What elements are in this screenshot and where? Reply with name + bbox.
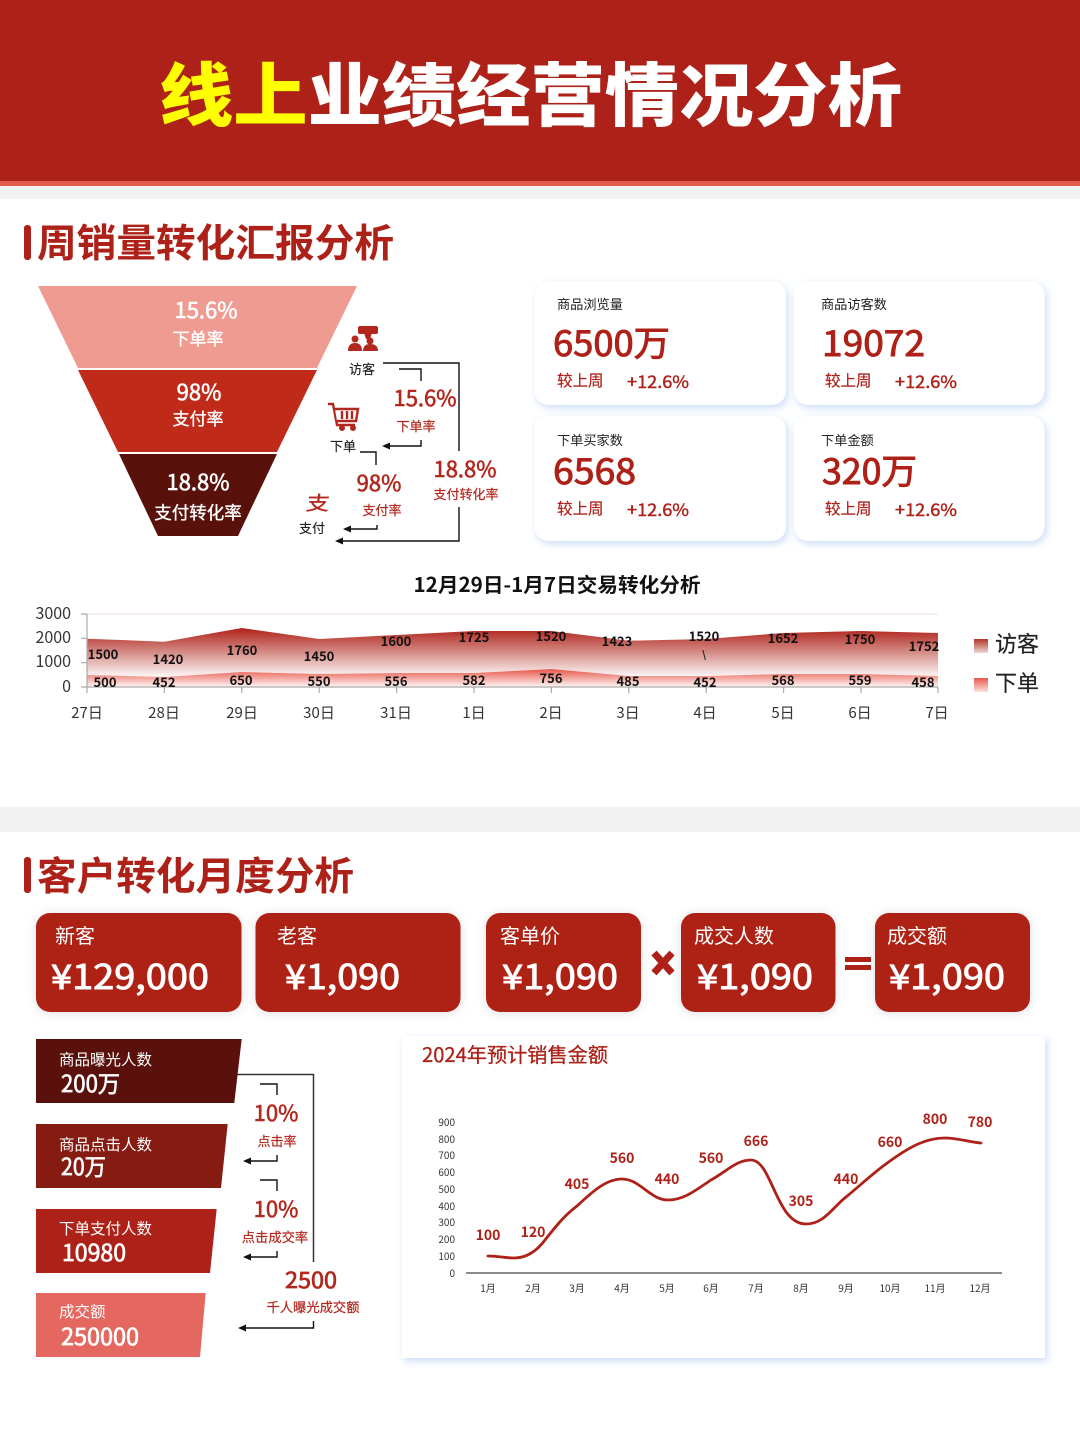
order series values: 559 (848, 670, 872, 689)
x axis labels: 4月 (614, 1280, 630, 1295)
visitor series values: 1500 (88, 644, 119, 663)
card: average order value (486, 913, 641, 1012)
y axis labels: 3000 (35, 600, 71, 624)
order series values: 500 (93, 672, 117, 691)
panel: funnel conversion flow (299, 326, 499, 541)
x axis labels: 3日 (616, 702, 640, 723)
chart axes (81, 614, 938, 693)
step: turnover (36, 1293, 206, 1357)
data labels: 666 (744, 1131, 768, 1151)
card: visitors (794, 281, 1044, 405)
data labels: 405 (565, 1174, 589, 1194)
flow labels: 下单 (330, 436, 356, 455)
x axis labels: 7月 (748, 1280, 764, 1295)
visitor series values: 1760 (227, 640, 258, 659)
card: new customers: ¥129,000 (51, 950, 209, 999)
step rates: 点击成交率 (242, 1227, 308, 1246)
data labels: 120 (521, 1222, 545, 1242)
card: order amount: 320万 (822, 444, 917, 495)
card: buyers: 成交人数 (694, 920, 774, 949)
y axis labels: 600 (438, 1164, 455, 1179)
legend (974, 627, 1039, 698)
x axis labels: 9月 (838, 1280, 854, 1295)
order series values: 550 (307, 671, 331, 690)
card: order amount: 较上周 (825, 497, 872, 519)
flow rates (357, 381, 499, 519)
y axis labels: 100 (438, 1248, 455, 1263)
visitor series values: 1450 (304, 646, 335, 665)
card: page views: +12.6% (627, 368, 689, 393)
step: payers: 10980 (62, 1234, 126, 1268)
x axis labels: 28日 (148, 702, 180, 723)
card: buyers: +12.6% (627, 496, 689, 521)
icon: shopping cart (328, 404, 358, 430)
flow labels: 访客 (349, 359, 375, 378)
step: exposure: 商品曝光人数 (59, 1048, 153, 1070)
card: visitors: +12.6% (895, 368, 957, 393)
flow labels (299, 359, 375, 537)
y axis labels: 1000 (35, 648, 71, 672)
order series values: 485 (616, 671, 640, 690)
visitor series values: 1600 (381, 631, 412, 650)
step: turnover: 成交额 (59, 1300, 106, 1322)
card: buyers: 6568 (553, 444, 636, 495)
y axis labels: 700 (438, 1147, 455, 1162)
visitor series values: 1752 (909, 636, 939, 655)
x axis labels: 8月 (793, 1280, 809, 1295)
flow rates: 支付转化率 (433, 484, 499, 503)
x axis labels: 30日 (303, 702, 335, 723)
order series values (93, 668, 935, 691)
order series values: 556 (384, 671, 408, 690)
y axis labels: 0 (62, 673, 71, 697)
card: buyers: 下单买家数 (557, 430, 623, 449)
data labels: 560 (610, 1148, 634, 1168)
card: visitors: 19072 (822, 316, 925, 367)
visitor series values: 1750 (845, 629, 876, 648)
card: buyers: ¥1,090 (697, 950, 813, 999)
step: payers (36, 1209, 217, 1273)
x axis labels: 2月 (525, 1280, 541, 1295)
card: page views: 6500万 (553, 316, 670, 367)
order series values: 452 (152, 672, 176, 691)
y axis labels: 2000 (35, 624, 71, 648)
card: page views (534, 281, 786, 405)
card: buyers (534, 416, 786, 541)
panel: conversion funnel (38, 286, 357, 536)
order series values: 756 (539, 668, 563, 687)
card: turnover: ¥1,090 (889, 950, 1005, 999)
data labels: 560 (699, 1148, 723, 1168)
y axis labels: 500 (438, 1181, 455, 1196)
data labels: 100 (476, 1225, 500, 1245)
chart title: 12月29日-1月7日交易转化分析 (414, 569, 700, 598)
icon: alipay glyph: 支 (305, 488, 332, 516)
panel: conversion funnel: 98% (177, 375, 221, 407)
panel: revenue formula cards (36, 913, 1030, 1012)
panel: conversion funnel: 15.6% (174, 293, 238, 325)
visitor series values: 1725 (459, 627, 489, 646)
x axis labels (480, 1280, 991, 1295)
legend: 下单 (995, 666, 1039, 698)
y axis labels: 300 (438, 1214, 455, 1229)
card: buyers (681, 913, 836, 1012)
y axis labels: 200 (438, 1231, 455, 1246)
card: page views: 较上周 (557, 369, 604, 391)
y axis labels (35, 600, 71, 697)
visitor series values: 1423 (602, 631, 632, 650)
card: average order value: ¥1,090 (502, 950, 618, 999)
card: order amount (794, 416, 1044, 541)
section heading: monthly customer conversion: 客户转化月度分析 (37, 846, 354, 902)
data labels: 780 (968, 1112, 992, 1132)
panel: conversion funnel: 支付率 (172, 405, 224, 430)
card: visitors: 较上周 (825, 369, 872, 391)
flow rates: 支付率 (362, 500, 402, 519)
card: order amount: 下单金额 (821, 430, 874, 449)
visitor series values: \ (702, 646, 706, 661)
visitor series values: 1652 (768, 628, 798, 647)
visitor series values: 1520 (689, 626, 720, 645)
y axis labels: 400 (438, 1198, 455, 1213)
y axis labels: 800 (438, 1131, 455, 1146)
x axis labels: 2日 (539, 702, 563, 723)
visitor series values (88, 626, 939, 668)
panel: exposure to turnover steps (36, 1039, 360, 1357)
card: turnover: 成交额 (887, 920, 947, 949)
x axis labels: 31日 (380, 702, 412, 723)
card: new customers: 新客 (55, 920, 95, 949)
legend: 访客 (995, 627, 1039, 659)
card: returning customers (256, 913, 460, 1012)
flow rates: 15.6% (393, 381, 457, 413)
step connector lines (237, 1074, 314, 1328)
data labels: 660 (878, 1132, 902, 1152)
sales line (488, 1138, 981, 1258)
step: exposure: 200万 (61, 1065, 120, 1099)
data labels: 800 (923, 1109, 947, 1129)
x axis labels: 7日 (925, 702, 949, 723)
x axis labels: 5日 (771, 702, 795, 723)
step rates: 点击率 (257, 1131, 297, 1150)
card: page views: 商品浏览量 (557, 294, 623, 313)
step: exposure (36, 1039, 242, 1103)
x axis labels: 1日 (462, 702, 486, 723)
card: returning customers: 老客 (277, 920, 317, 949)
flow rates: 98% (357, 466, 401, 498)
panel: KPI cards (534, 281, 1044, 541)
step rates: 2500 (285, 1263, 337, 1295)
step: turnover: 250000 (61, 1318, 139, 1352)
x axis labels: 12月 (969, 1280, 991, 1295)
chart: transaction conversion area chart (35, 569, 1039, 723)
order series values: 650 (229, 670, 253, 689)
visitor series values: 1520 (536, 626, 567, 645)
panel: conversion funnel: 18.8% (166, 465, 230, 497)
icon: visitors (348, 326, 378, 351)
x axis labels: 1月 (480, 1280, 496, 1295)
x axis labels: 10月 (879, 1280, 901, 1295)
card: returning customers: ¥1,090 (285, 950, 400, 999)
card: new customers (36, 913, 242, 1012)
data labels: 440 (834, 1169, 858, 1189)
card: buyers: 较上周 (557, 497, 604, 519)
flow labels: 支付 (299, 518, 325, 537)
step rates: 10% (254, 1192, 298, 1224)
order series values: 582 (462, 670, 486, 689)
y axis labels: 0 (449, 1265, 455, 1280)
chart: 2024 forecast sales line chart (402, 1036, 1045, 1358)
title: 线上业绩经营情况分析 (159, 40, 902, 140)
flow rates: 下单率 (396, 416, 436, 435)
flow rates: 18.8% (433, 452, 497, 484)
chart title: 2024年预计销售金额 (422, 1039, 608, 1068)
icon: multiply (654, 953, 672, 973)
x axis labels: 3月 (569, 1280, 585, 1295)
step: payers: 下单支付人数 (59, 1217, 153, 1239)
card: average order value: 客单价 (500, 920, 560, 949)
order series values: 458 (911, 672, 935, 691)
data labels: 305 (789, 1191, 813, 1211)
x axis labels: 4日 (693, 702, 717, 723)
card: turnover (875, 913, 1030, 1012)
panel: conversion funnel: 下单率 (172, 325, 224, 350)
x axis labels (71, 702, 949, 723)
visitor series values: 1420 (153, 649, 184, 668)
icon: equals (845, 960, 871, 968)
step: clicks: 商品点击人数 (59, 1133, 153, 1155)
card: visitors: 商品访客数 (821, 294, 887, 313)
step rates: 10% (254, 1096, 298, 1128)
section heading: weekly sales conversion: 周销量转化汇报分析 (37, 213, 394, 269)
data labels: 440 (655, 1169, 679, 1189)
x axis labels: 6月 (703, 1280, 719, 1295)
data labels (476, 1109, 992, 1245)
step: clicks: 20万 (61, 1148, 106, 1182)
x axis labels: 29日 (226, 702, 258, 723)
x axis labels: 5月 (659, 1280, 675, 1295)
order series values: 568 (771, 670, 795, 689)
panel: conversion funnel: 支付转化率 (154, 500, 242, 525)
x axis labels: 27日 (71, 702, 103, 723)
x axis labels: 6日 (848, 702, 872, 723)
section divider band (0, 807, 1080, 832)
flow connector lines (342, 363, 459, 541)
y axis labels (438, 1114, 455, 1280)
y axis labels: 900 (438, 1114, 455, 1129)
step rates (242, 1096, 360, 1316)
step: clicks (36, 1124, 228, 1188)
step rates: 千人曝光成交额 (266, 1297, 360, 1316)
order series values: 452 (693, 672, 717, 691)
card: order amount: +12.6% (895, 496, 957, 521)
x axis labels: 11月 (924, 1280, 946, 1295)
header banner (0, 0, 1080, 199)
